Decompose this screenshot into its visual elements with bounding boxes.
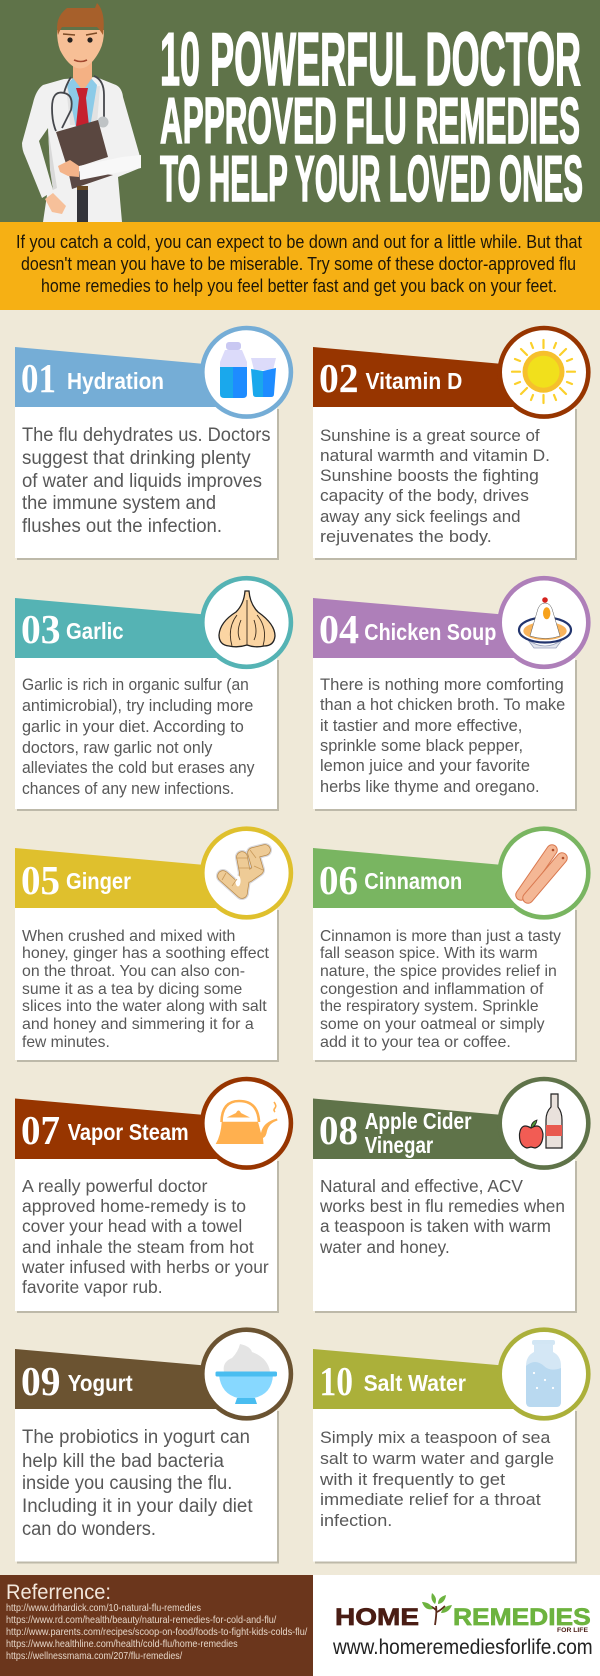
icon: garlic xyxy=(219,591,275,647)
icon: cinnamon sticks xyxy=(521,849,564,898)
illustration: doctor xyxy=(22,3,141,222)
footer: references: Referrence: xyxy=(6,1581,111,1604)
icon: water bottle xyxy=(526,1340,561,1407)
text block xyxy=(22,676,255,798)
footer: logo: REMEDIES xyxy=(453,1604,591,1631)
text block xyxy=(22,425,270,537)
panel: 02 vitamin D: Vitamin D xyxy=(366,368,462,394)
panel: 01 hydration xyxy=(15,328,291,560)
text block: flushes out the infection. xyxy=(22,516,222,537)
panel: 04 chicken soup: Chicken Soup xyxy=(364,619,496,645)
text block: sume it as a tea by dicing some xyxy=(22,981,242,998)
text block: antimicrobial), try including more xyxy=(22,697,253,715)
text block: approved home-remedy is to xyxy=(22,1196,246,1216)
panel: 01 hydration: Hydration xyxy=(67,368,164,394)
text block xyxy=(320,675,565,796)
panel: 08 apple cider vinegar: Apple Cider xyxy=(365,1108,472,1134)
panel: 08 apple cider vinegar: 08 xyxy=(319,1107,358,1153)
text block: There is nothing more comforting xyxy=(320,675,564,694)
header banner xyxy=(0,0,600,222)
text block xyxy=(22,1427,253,1540)
panel: 05 ginger xyxy=(15,829,291,1062)
text block: Sunshine is a great source of xyxy=(320,426,540,445)
icon: sun xyxy=(512,340,575,403)
text block: Sunshine boosts the fighting xyxy=(320,466,539,485)
panel: 02 vitamin D: 02 xyxy=(319,355,359,401)
text block xyxy=(320,928,561,1051)
text block: some on your oatmeal or simply xyxy=(320,1016,545,1033)
text block xyxy=(21,1176,269,1297)
intro band xyxy=(0,222,600,310)
footer: logo: FOR LIFE xyxy=(557,1628,588,1634)
text block: inside you causing the flu. xyxy=(22,1473,232,1494)
panel: 08 apple cider vinegar: Vinegar xyxy=(365,1132,433,1158)
text block: water and honey. xyxy=(319,1237,450,1257)
panel: 04 chicken soup: 04 xyxy=(319,606,359,652)
text block: A really powerful doctor xyxy=(22,1176,208,1196)
text block: alleviates the cold but erases any xyxy=(22,759,255,777)
text block: the respiratory system. Sprinkle xyxy=(320,998,539,1015)
text block: add it to your tea or coffee. xyxy=(320,1034,511,1051)
text block: on the throat. You can also con- xyxy=(22,963,245,980)
text block: salt to warm water and gargle xyxy=(320,1449,554,1468)
text block: capacity of the body, drives xyxy=(320,486,529,505)
text block: it tastier and more effective, xyxy=(320,716,522,735)
panel: 09 yogurt xyxy=(15,1330,291,1564)
text block: and inhale the steam from hot xyxy=(22,1237,254,1257)
panel: 06 cinnamon: 06 xyxy=(319,857,358,903)
text block: can do wonders. xyxy=(22,1519,156,1540)
text block: the immune system and xyxy=(22,493,216,514)
panel: 10 salt water: Salt Water xyxy=(364,1370,466,1396)
text block: than a hot chicken broth. To make xyxy=(320,695,565,714)
text block: nature, the spice provides relief in xyxy=(320,963,557,980)
text block: The flu dehydrates us. Doctors xyxy=(22,425,270,446)
text block: Garlic is rich in organic sulfur (an xyxy=(22,676,249,694)
panel: 01 hydration: 01 xyxy=(21,355,56,401)
text block: water infused with herbs or your xyxy=(21,1257,269,1277)
text block: away any sick feelings and xyxy=(320,507,520,526)
panel: 09 yogurt: 09 xyxy=(21,1358,60,1404)
text block: garlic in your diet. According to xyxy=(22,718,244,736)
panel: 09 yogurt: Yogurt xyxy=(68,1370,133,1396)
footer: references: http://www.parents.com/recipes/scoop-on-food/foods-to-fight-kids-colds-flu/ xyxy=(6,1626,307,1638)
text block: rejuvenates the body. xyxy=(320,527,492,546)
footer: references: https://wellnessmama.com/207/flu-remedies/ xyxy=(6,1650,182,1662)
icon: ginger xyxy=(222,850,265,893)
footer: logo xyxy=(313,1575,600,1676)
text block: Natural and effective, ACV xyxy=(320,1176,523,1196)
text block: works best in flu remedies when xyxy=(319,1196,565,1216)
text block: honey, ginger has a soothing effect xyxy=(22,945,270,962)
icon: kettle xyxy=(216,1101,278,1144)
text block: sprinkle some black pepper, xyxy=(320,736,523,755)
text block: cover your head with a towel xyxy=(22,1216,242,1236)
panel: 10 salt water xyxy=(313,1330,588,1564)
panel: 06 cinnamon xyxy=(313,829,588,1062)
text block: Including it in your daily diet xyxy=(22,1496,253,1517)
title xyxy=(160,17,583,215)
footer: logo: HOME xyxy=(335,1604,419,1631)
text block: natural warmth and vitamin D. xyxy=(320,446,550,465)
text block: with it frequently to get xyxy=(319,1470,505,1489)
panel: 04 chicken soup xyxy=(313,578,588,811)
panel: 06 cinnamon: Cinnamon xyxy=(364,868,462,894)
text block xyxy=(22,928,270,1051)
icon: water bottle and glass xyxy=(220,342,276,398)
text block xyxy=(319,1176,565,1257)
text block xyxy=(319,1428,554,1530)
panel: 05 ginger: Ginger xyxy=(66,868,131,894)
text block: herbs like thyme and oregano. xyxy=(320,777,540,796)
panel: 07 vapor steam xyxy=(15,1079,291,1313)
icon: apple and vinegar bottle xyxy=(519,1094,562,1148)
text block: Simply mix a teaspoon of sea xyxy=(320,1428,551,1447)
icon: chicken soup xyxy=(519,597,571,648)
text block: infection. xyxy=(320,1511,392,1530)
panel: 08 apple cider vinegar xyxy=(313,1079,588,1313)
text block: Cinnamon is more than just a tasty xyxy=(320,928,561,945)
footer: references: https://www.healthline.com/health/cold-flu/home-remedies xyxy=(6,1638,238,1650)
text block: of water and liquids improves xyxy=(22,471,262,492)
text block: fall season spice. With its warm xyxy=(320,945,538,962)
footer: references: http://www.drhardick.com/10-natural-flu-remedies xyxy=(6,1602,201,1614)
footer: references xyxy=(0,1575,313,1676)
text block: The probiotics in yogurt can xyxy=(22,1427,250,1448)
text block: immediate relief for a throat xyxy=(320,1490,541,1509)
panel: 03 garlic: Garlic xyxy=(66,618,124,644)
text block: favorite vapor rub. xyxy=(22,1277,163,1297)
text block xyxy=(320,426,550,546)
text block: suggest that drinking plenty xyxy=(22,448,251,469)
text block: and honey and simmering it for a xyxy=(22,1016,254,1033)
footer: references: https://www.rd.com/health/beauty/natural-remedies-for-cold-and-flu/ xyxy=(6,1614,276,1626)
panel: 10 salt water: 10 xyxy=(320,1358,353,1404)
text block: When crushed and mixed with xyxy=(22,928,235,945)
text block: help kill the bad bacteria xyxy=(22,1451,224,1472)
text block: doctors, raw garlic not only xyxy=(22,739,213,757)
text block: congestion and inflammation of xyxy=(320,981,544,998)
text block: slices into the water along with salt xyxy=(22,998,267,1015)
text block: a teaspoon is taken with warm xyxy=(320,1216,551,1236)
panel: 07 vapor steam: 07 xyxy=(21,1107,60,1153)
panel: 03 garlic: 03 xyxy=(21,606,60,652)
text block: chances of any new infections. xyxy=(22,780,234,798)
panel: 05 ginger: 05 xyxy=(21,857,60,903)
text block: few minutes. xyxy=(22,1034,110,1051)
panel: 02 vitamin D xyxy=(313,328,588,560)
panel: 03 garlic xyxy=(15,578,291,811)
icon: tree xyxy=(422,1593,452,1625)
text block: lemon juice and your favorite xyxy=(320,756,530,775)
icon: yogurt bowl xyxy=(216,1344,277,1404)
panel: 07 vapor steam: Vapor Steam xyxy=(68,1119,189,1145)
